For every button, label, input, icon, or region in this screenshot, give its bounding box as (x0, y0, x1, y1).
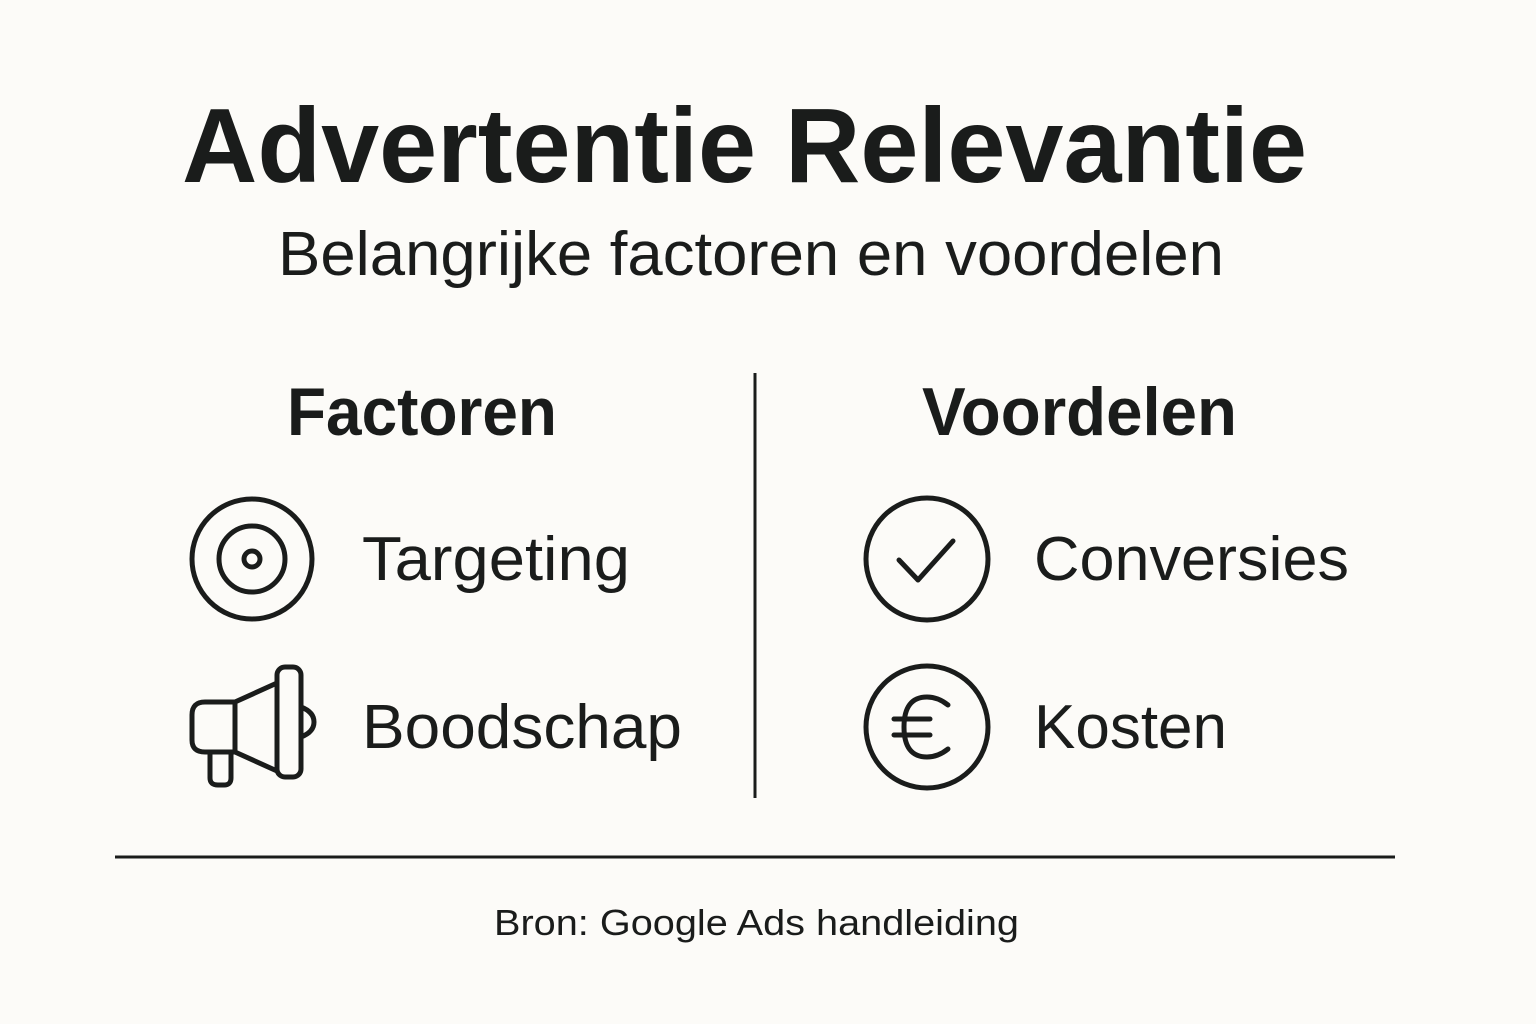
label: Targeting: Targeting (362, 525, 630, 594)
icon: megaphone (192, 667, 314, 785)
source text: Bron: Google Ads handleiding (494, 902, 1019, 943)
label: Kosten: Kosten (1034, 693, 1227, 762)
heading: Factoren: Factoren (287, 374, 557, 450)
title: Advertentie Relevantie (182, 87, 1307, 205)
icon: check (866, 498, 988, 620)
subtitle: Belangrijke factoren en voordelen (278, 220, 1224, 289)
label: Boodschap: Boodschap (362, 693, 682, 762)
heading: Voordelen: Voordelen (922, 374, 1237, 450)
label: Conversies: Conversies (1034, 525, 1349, 594)
icon: target (192, 499, 312, 619)
icon: euro (866, 666, 988, 788)
